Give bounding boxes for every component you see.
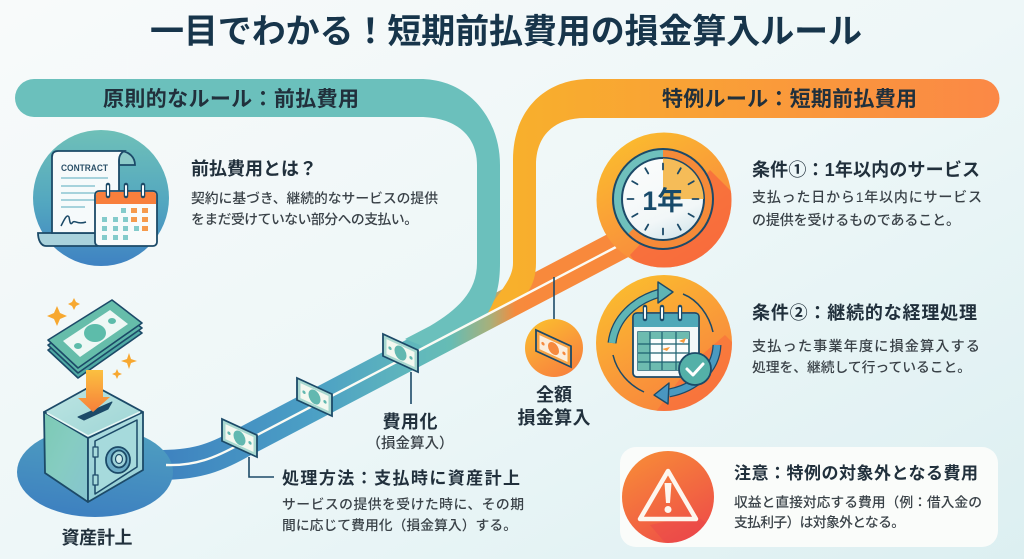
- text block: condition 2: 条件②：継続的な経理処理: [752, 302, 977, 323]
- text block: condition 1: の提供を受けるものであること。: [752, 212, 960, 228]
- text block: what is prepaid expense: 前払費用とは？: [191, 159, 317, 179]
- label: expensing: 費用化: [382, 412, 438, 432]
- icon: contract and calendar: [33, 130, 169, 266]
- text block: processing method: サービスの提供を受けた時に、その期: [282, 496, 524, 512]
- icon: sparkles: [47, 298, 137, 379]
- icon: one-year clock: 1年: [642, 186, 684, 216]
- heading: special rule: 特例ルール：短期前払費用: [662, 88, 917, 111]
- panel: caution: 注意：特例の対象外となる費用: [734, 463, 978, 483]
- flow ribbon: diagonal path: [150, 234, 640, 465]
- icon: bill 2: [297, 378, 332, 416]
- text block: condition 2: 支払った事業年度に損金算入する: [752, 338, 980, 355]
- text block: processing method: 間に応じて費用化（損金算入）する。: [282, 517, 517, 533]
- label: expensing: [366, 412, 454, 452]
- label: asset recording: 資産計上: [62, 528, 132, 548]
- text block: condition 1: 支払った日から1年以内にサービス: [752, 189, 982, 205]
- icon: warning: [622, 451, 714, 543]
- leader: processing method: [249, 457, 274, 477]
- blob under safe: [17, 427, 173, 517]
- text block: condition 1: 条件①：1年以内のサービス: [752, 159, 980, 180]
- text block: what is prepaid expense: をまだ受けていない部分への支払い。: [191, 211, 418, 227]
- text block: condition 1: [752, 159, 982, 228]
- icon: money stack: [48, 300, 142, 378]
- icon: contract and calendar: CONTRACT: [61, 163, 108, 174]
- icon: safe: [44, 385, 143, 502]
- heading: principle: 原則的なルール：前払費用: [103, 88, 359, 111]
- leader: expensing: [410, 372, 412, 404]
- arrow: into safe: [78, 370, 110, 412]
- icon: accounting cycle calendar: [596, 275, 732, 411]
- icon: one-year clock: [596, 132, 732, 268]
- text block: condition 2: 処理を、継続して行っていること。: [752, 359, 971, 375]
- icon: full amount bill: [525, 319, 583, 377]
- ribbon: principle header: [15, 79, 500, 347]
- text block: what is prepaid expense: [191, 159, 438, 227]
- ribbon: special rule header: [487, 79, 1000, 314]
- text block: processing method: 処理方法：支払時に資産計上: [282, 468, 520, 488]
- label: full amount: 損金算入: [518, 407, 590, 428]
- text block: condition 2: [752, 302, 980, 375]
- text block: what is prepaid expense: 契約に基づき、継続的なサービスの提供: [191, 190, 438, 206]
- title: 一目でわかる！短期前払費用の損金算入ルール: [150, 13, 862, 51]
- label: full amount: 全額: [536, 385, 572, 405]
- leader: full amount: [553, 277, 555, 320]
- panel: caution: 支払利子）は対象外となる。: [734, 514, 905, 530]
- icon: bill 1: [222, 419, 257, 457]
- label: expensing: （損金算入）: [366, 434, 454, 452]
- panel: caution: 収益と直接対応する費用（例：借入金の: [734, 494, 982, 510]
- panel: caution: [620, 447, 998, 547]
- text block: processing method: [282, 468, 524, 533]
- flow line: white centre line: [166, 247, 616, 465]
- icon: bill 3: [383, 334, 418, 372]
- label: full amount: [518, 385, 590, 428]
